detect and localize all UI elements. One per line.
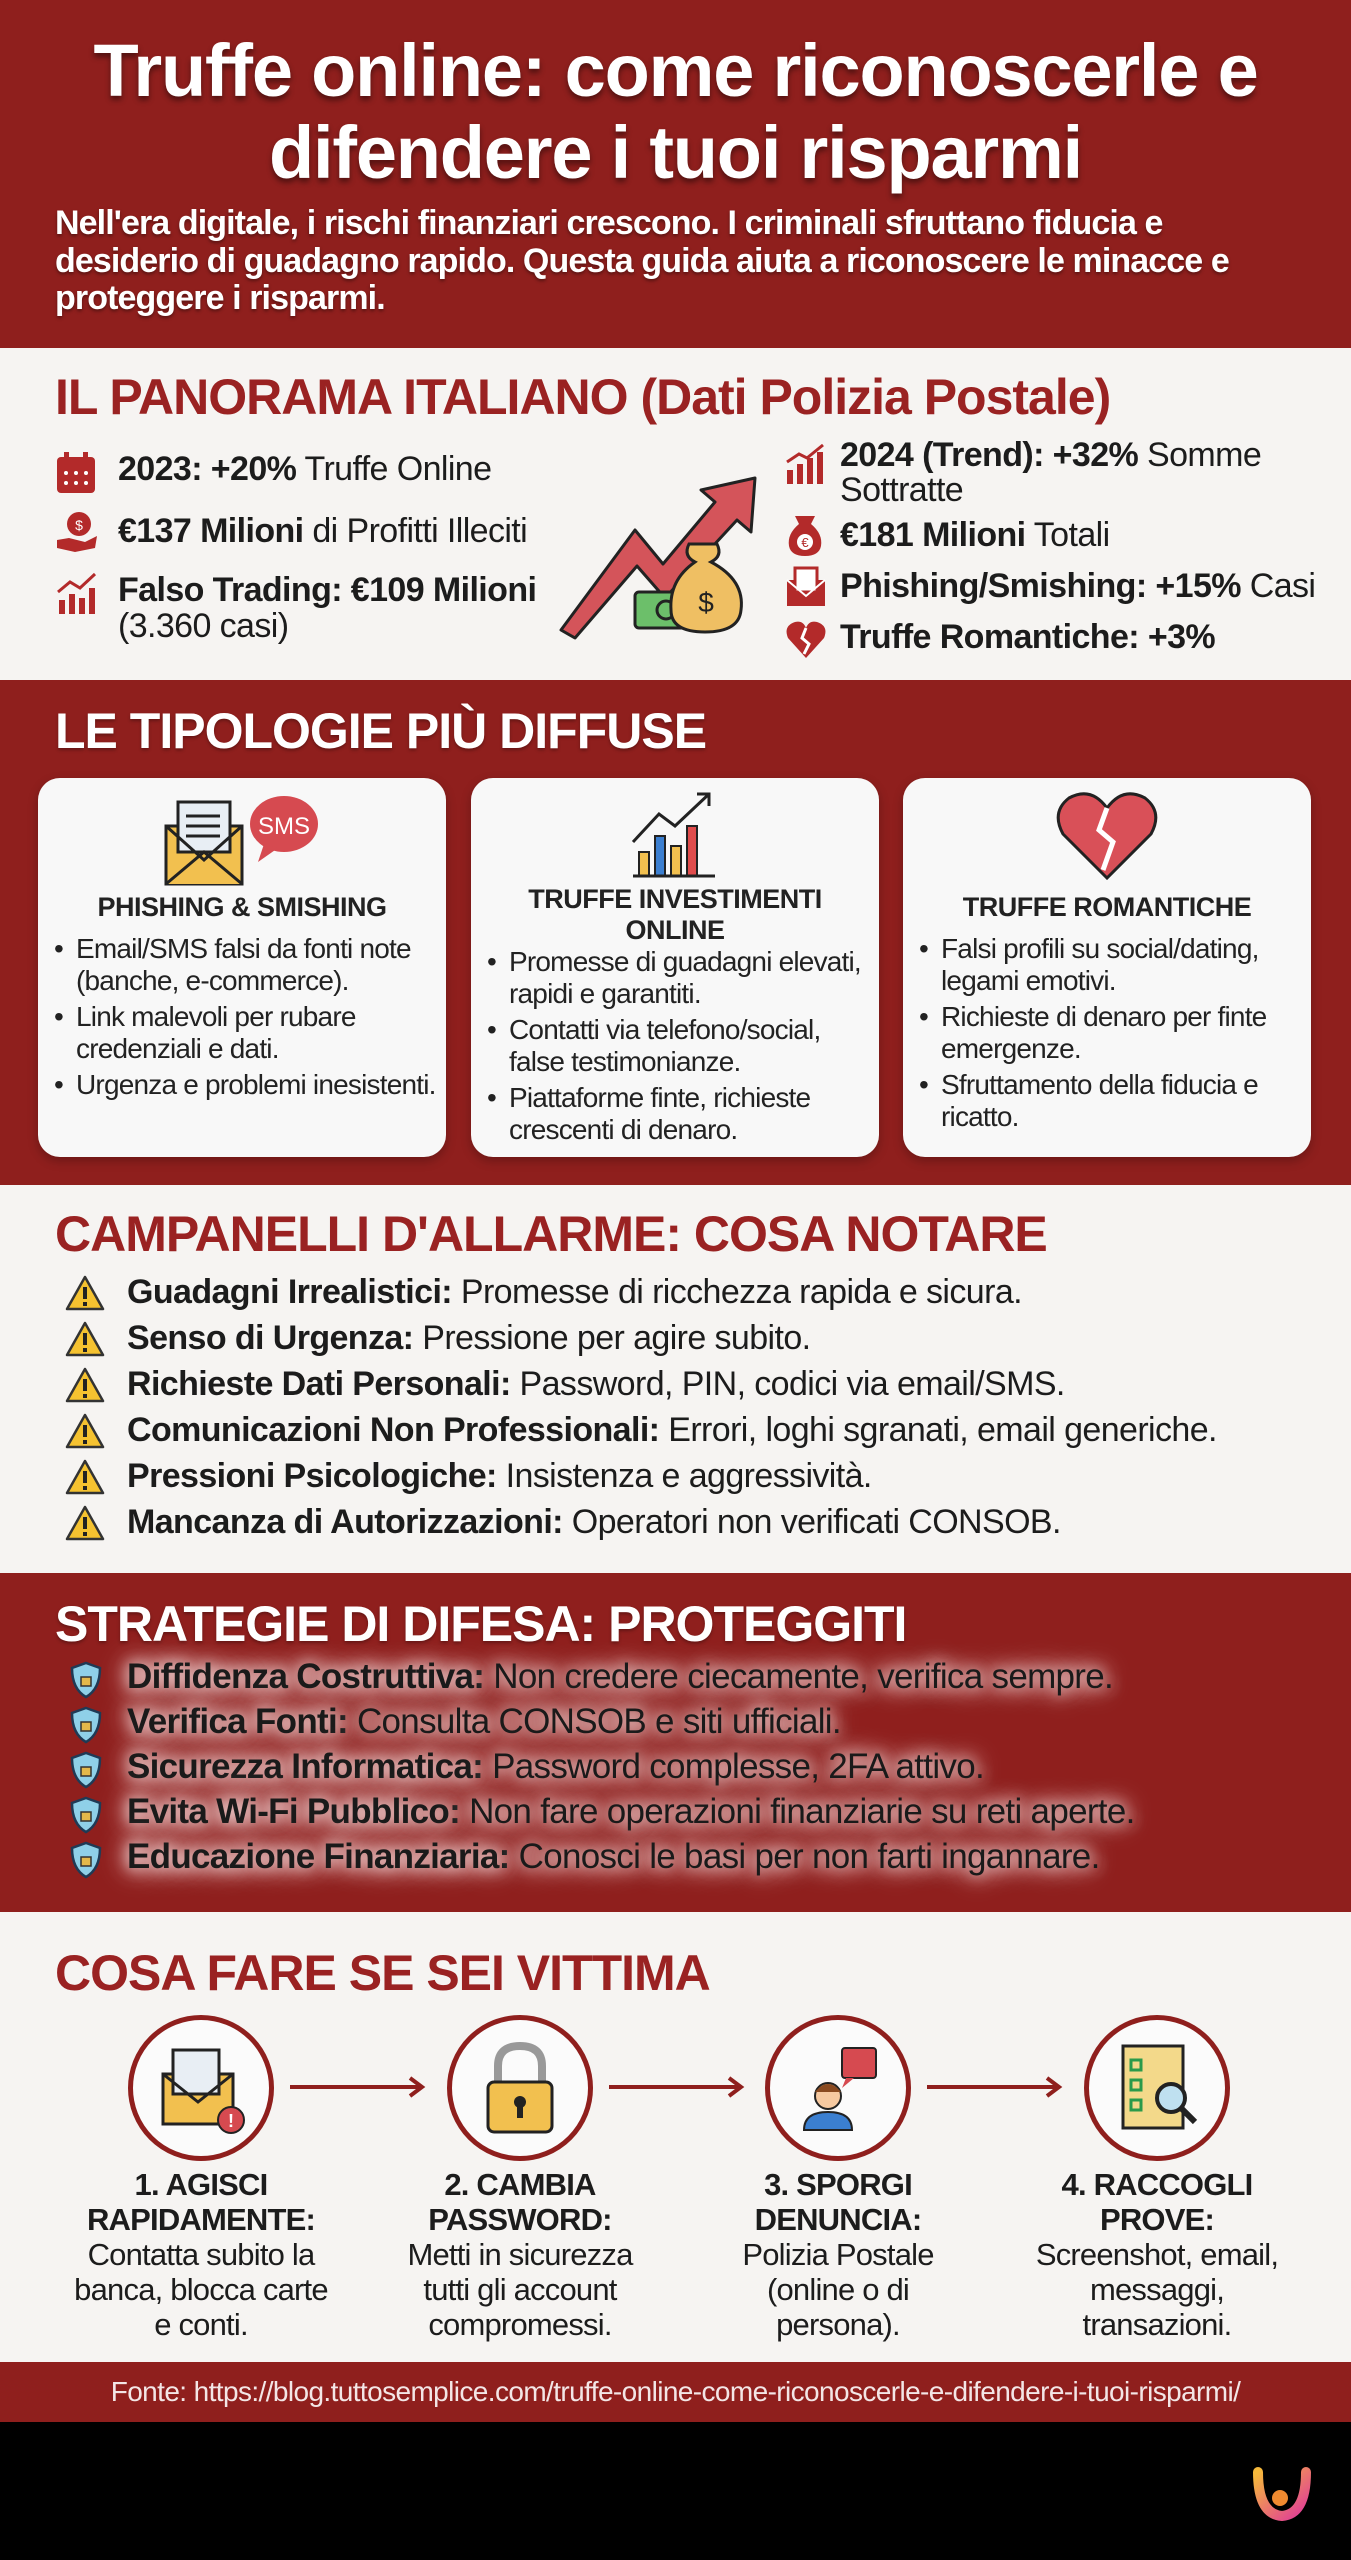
stat 181 milioni: €181 Milioni Totali bbox=[840, 516, 1110, 554]
warning item 3: Richieste Dati Personali: Password, PIN, codici via email/SMS. bbox=[127, 1365, 1065, 1403]
stat 2024 trend: Sottratte bbox=[840, 471, 963, 509]
heading strategie: STRATEGIE DI DIFESA: PROTEGGITI bbox=[55, 1596, 906, 1652]
step label 3: Polizia Postale bbox=[742, 2237, 934, 2272]
icon: broken heart bbox=[1056, 792, 1158, 880]
card title: TRUFFE ROMANTICHE bbox=[963, 892, 1251, 922]
step label 2: 2. CAMBIA bbox=[444, 2167, 596, 2202]
card bullets: Falsi profili su social/dating, legami emotivi. bbox=[941, 933, 1259, 996]
step label 4: 4. RACCOGLI bbox=[1062, 2167, 1252, 2202]
footer source: Fonte: https://blog.tuttosemplice.com/truffe-online-come-riconoscerle-e-difendere-i-tuoi-risparmi/ bbox=[111, 2376, 1240, 2407]
card: romantiche bbox=[903, 778, 1311, 1157]
title: Truffe online: come riconoscerle e bbox=[93, 29, 1258, 112]
step label 2: compromessi. bbox=[428, 2307, 612, 2342]
card: investimenti bbox=[471, 778, 879, 1157]
step label 4: transazioni. bbox=[1083, 2307, 1231, 2342]
step label 1: banca, blocca carte bbox=[74, 2272, 328, 2307]
title bbox=[92, 29, 1259, 200]
icon: calendar bbox=[57, 452, 95, 493]
defense item 5: Educazione Finanziaria: Conosci le basi per non farti ingannare. bbox=[127, 1837, 1100, 1876]
step label 4: Screenshot, email, bbox=[1036, 2237, 1278, 2272]
icon: envelope sms bbox=[164, 796, 318, 886]
step circle 1: ! bbox=[228, 2111, 234, 2131]
heading tipologie: LE TIPOLOGIE PIÙ DIFFUSE bbox=[55, 703, 706, 759]
stat falso trading bbox=[118, 571, 536, 645]
icon: envelope bbox=[786, 566, 826, 606]
card bullets: Richieste di denaro per finte emergenze. bbox=[941, 1001, 1266, 1064]
icon: trading chart bbox=[57, 572, 96, 614]
step label 3: DENUNCIA: bbox=[755, 2202, 921, 2237]
panel: strategie di difesa bbox=[0, 1573, 1351, 1912]
step label 3: (online o di bbox=[767, 2272, 909, 2307]
defense item 4 bbox=[70, 1782, 1143, 1844]
card bullets: Contatti via telefono/social, false testimonianze. bbox=[509, 1014, 820, 1077]
step label 4 bbox=[997, 2167, 1317, 2342]
header section bbox=[0, 0, 1351, 348]
step label 4: PROVE: bbox=[1100, 2202, 1214, 2237]
defense item 3: Sicurezza Informatica: Password complesse, 2FA attivo. bbox=[127, 1747, 984, 1786]
card bullets: Link malevoli per rubare credenziali e dati. bbox=[76, 1001, 356, 1064]
arrow 2 bbox=[609, 2076, 744, 2098]
footer source bbox=[0, 2362, 1351, 2422]
card bullets: Piattaforme finte, richieste crescenti di denaro. bbox=[509, 1082, 810, 1145]
panel: campanelli d'allarme bbox=[0, 1185, 1351, 1573]
stat falso trading: Falso Trading: €109 Milioni bbox=[118, 571, 536, 609]
step label 4: messaggi, bbox=[1090, 2272, 1224, 2307]
icon: trend chart bbox=[786, 444, 824, 484]
defense item 2: Verifica Fonti: Consulta CONSOB e siti ufficiali. bbox=[127, 1702, 841, 1741]
step label 2: Metti in sicurezza bbox=[407, 2237, 633, 2272]
icon: euro bag bbox=[788, 516, 822, 556]
logo bbox=[1252, 2464, 1312, 2524]
icon: broken heart bbox=[786, 622, 826, 658]
step label 1: RAPIDAMENTE: bbox=[87, 2202, 315, 2237]
step circle 3 bbox=[765, 2015, 911, 2161]
step label 1: Contatta subito la bbox=[88, 2237, 314, 2272]
defense item 2 bbox=[70, 1692, 849, 1752]
card title: ONLINE bbox=[625, 915, 724, 945]
card bullets bbox=[920, 933, 1266, 1132]
subtitle: Nell'era digitale, i rischi finanziari crescono. I criminali sfruttano fiducia e bbox=[55, 204, 1163, 242]
step circle 2 bbox=[447, 2015, 593, 2161]
step circle 1 bbox=[128, 2015, 274, 2161]
stat 2023: 2023: +20% Truffe Online bbox=[118, 450, 491, 488]
stat falso trading: (3.360 casi) bbox=[118, 607, 288, 645]
step label 3: 3. SPORGI bbox=[764, 2167, 912, 2202]
defense item 4: Evita Wi-Fi Pubblico: Non fare operazioni finanziarie su reti aperte. bbox=[127, 1792, 1135, 1831]
heading vittima: COSA FARE SE SEI VITTIMA bbox=[55, 1945, 710, 2001]
warning list bbox=[66, 1273, 1217, 1541]
warning item 4: Comunicazioni Non Professionali: Errori, loghi sgranati, email generiche. bbox=[127, 1411, 1217, 1449]
warning item 1: Guadagni Irrealistici: Promesse di ricchezza rapida e sicura. bbox=[127, 1273, 1022, 1311]
defense item 1 bbox=[70, 1644, 1122, 1709]
heading panorama: IL PANORAMA ITALIANO (Dati Polizia Postale) bbox=[55, 369, 1110, 425]
defense item 1: Diffidenza Costruttiva: Non credere ciecamente, verifica sempre. bbox=[127, 1657, 1113, 1696]
subtitle: desiderio di guadagno rapido. Questa guida aiuta a riconoscere le minacce e bbox=[55, 242, 1229, 280]
title: difendere i tuoi risparmi bbox=[269, 111, 1082, 194]
panel: tipologie bbox=[0, 680, 1351, 1185]
chart: rising arrow with money bbox=[559, 476, 756, 640]
stat 137 milioni: €137 Milioni di Profitti Illeciti bbox=[118, 512, 527, 550]
step label 2 bbox=[360, 2167, 680, 2342]
heading campanelli: CAMPANELLI D'ALLARME: COSA NOTARE bbox=[55, 1206, 1047, 1262]
stat 2024 trend bbox=[840, 436, 1261, 509]
warning item 6: Mancanza di Autorizzazioni: Operatori non verificati CONSOB. bbox=[127, 1503, 1061, 1541]
chart: rising arrow with money: $ bbox=[698, 587, 714, 618]
subtitle: proteggere i risparmi. bbox=[55, 279, 385, 317]
card: phishing bbox=[38, 778, 446, 1157]
arrow 3 bbox=[927, 2076, 1062, 2098]
card bullets: Promesse di guadagni elevati, rapidi e garantiti. bbox=[509, 946, 861, 1009]
step label 2: PASSWORD: bbox=[428, 2202, 612, 2237]
card bullets bbox=[55, 933, 436, 1100]
stat romantiche: Truffe Romantiche: +3% bbox=[840, 618, 1215, 656]
icon: envelope sms: SMS bbox=[258, 813, 310, 840]
defense item 5 bbox=[70, 1827, 1108, 1892]
icon: euro bag: € bbox=[801, 535, 809, 550]
card bullets: Email/SMS falsi da fonti note (banche, e-commerce). bbox=[76, 933, 411, 996]
card bullets: Urgenza e problemi inesistenti. bbox=[76, 1069, 436, 1100]
warning item 2: Senso di Urgenza: Pressione per agire subito. bbox=[127, 1319, 811, 1357]
panel: cosa fare se sei vittima bbox=[0, 1912, 1351, 2362]
arrow 1 bbox=[290, 2076, 426, 2098]
icon: hand money bbox=[57, 512, 97, 552]
defense list bbox=[70, 1644, 1143, 1892]
card bullets bbox=[488, 946, 861, 1145]
warning item 5: Pressioni Psicologiche: Insistenza e aggressività. bbox=[127, 1457, 872, 1495]
card title: PHISHING & SMISHING bbox=[97, 892, 387, 922]
step label 1: e conti. bbox=[154, 2307, 248, 2342]
subtitle bbox=[55, 204, 1230, 320]
step label 3: persona). bbox=[776, 2307, 900, 2342]
step label 2: tutti gli account bbox=[423, 2272, 617, 2307]
defense item 3 bbox=[70, 1735, 992, 1798]
card title: TRUFFE INVESTIMENTI bbox=[528, 884, 822, 914]
card title bbox=[528, 884, 822, 945]
step circle 4 bbox=[1084, 2015, 1230, 2161]
step label 1 bbox=[41, 2167, 361, 2342]
step label 3 bbox=[678, 2167, 998, 2342]
card bullets: Sfruttamento della fiducia e ricatto. bbox=[941, 1069, 1258, 1132]
step label 1: 1. AGISCI bbox=[135, 2167, 267, 2202]
panel: panorama italiano bbox=[0, 348, 1351, 680]
icon: bar chart bbox=[632, 792, 715, 878]
stat phishing: Phishing/Smishing: +15% Casi bbox=[840, 567, 1315, 605]
stat 2024 trend: 2024 (Trend): +32% Somme bbox=[840, 436, 1261, 474]
icon: hand money: $ bbox=[75, 517, 83, 533]
